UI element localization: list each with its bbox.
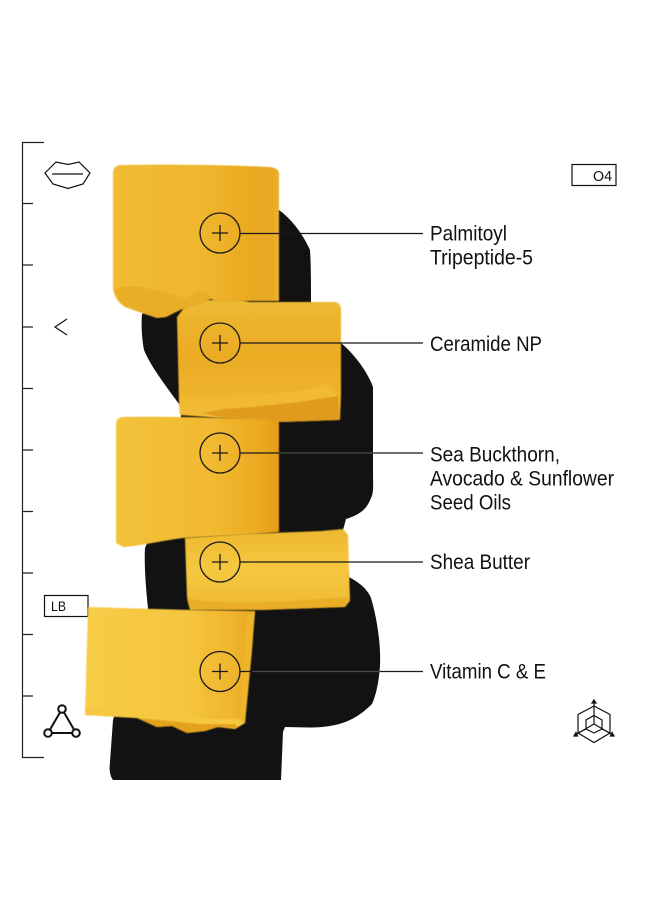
callout 4: Shea Butter: Shea Butter: [430, 551, 530, 574]
label box: LB: LB: [51, 598, 66, 614]
balm piece 4: [185, 529, 350, 610]
label box: 04: O4: [593, 169, 612, 185]
callout 1: Palmitoyl Tripeptide-5: [200, 213, 533, 270]
callout 2: Ceramide NP: [200, 323, 542, 363]
scale ruler: [22, 142, 44, 758]
balm piece 5: [85, 607, 255, 733]
callout 3: Sea Buckthorn, Avocado and Sunflower Seed Oils: Seed Oils: [430, 492, 511, 514]
icon: lips: [45, 162, 90, 188]
icon: 3D cube with axes: [574, 700, 614, 742]
darker underside: [203, 396, 340, 422]
icon: triangle of nodes: [44, 705, 80, 737]
torn lip: [179, 383, 339, 415]
label box: 04: [572, 164, 616, 186]
balm piece 2: [177, 300, 341, 422]
black shadow shape: [110, 210, 380, 780]
callout 4: Shea Butter: [200, 542, 530, 582]
callout 3: Sea Buckthorn, Avocado and Sunflower Seed Oils: Avocado & Sunflower: [430, 468, 614, 490]
icon: left chevron: [55, 319, 67, 335]
torn underside: [115, 286, 211, 318]
callout 3: Sea Buckthorn, Avocado and Sunflower Seed Oils: [200, 433, 614, 514]
callout 1: Palmitoyl Tripeptide-5: Palmitoyl: [430, 222, 507, 246]
label box: LB: [44, 596, 88, 616]
callout 3: Sea Buckthorn, Avocado and Sunflower Seed Oils: Sea Buckthorn,: [430, 444, 560, 466]
callout 5: Vitamin C and E: [200, 652, 546, 692]
balm piece 1: [113, 165, 279, 318]
callout 5: Vitamin C and E: Vitamin C & E: [430, 660, 546, 684]
callout 1: Palmitoyl Tripeptide-5: Tripeptide-5: [430, 246, 533, 270]
callout 2: Ceramide NP: Ceramide NP: [430, 333, 542, 356]
balm piece 3: [116, 417, 279, 547]
